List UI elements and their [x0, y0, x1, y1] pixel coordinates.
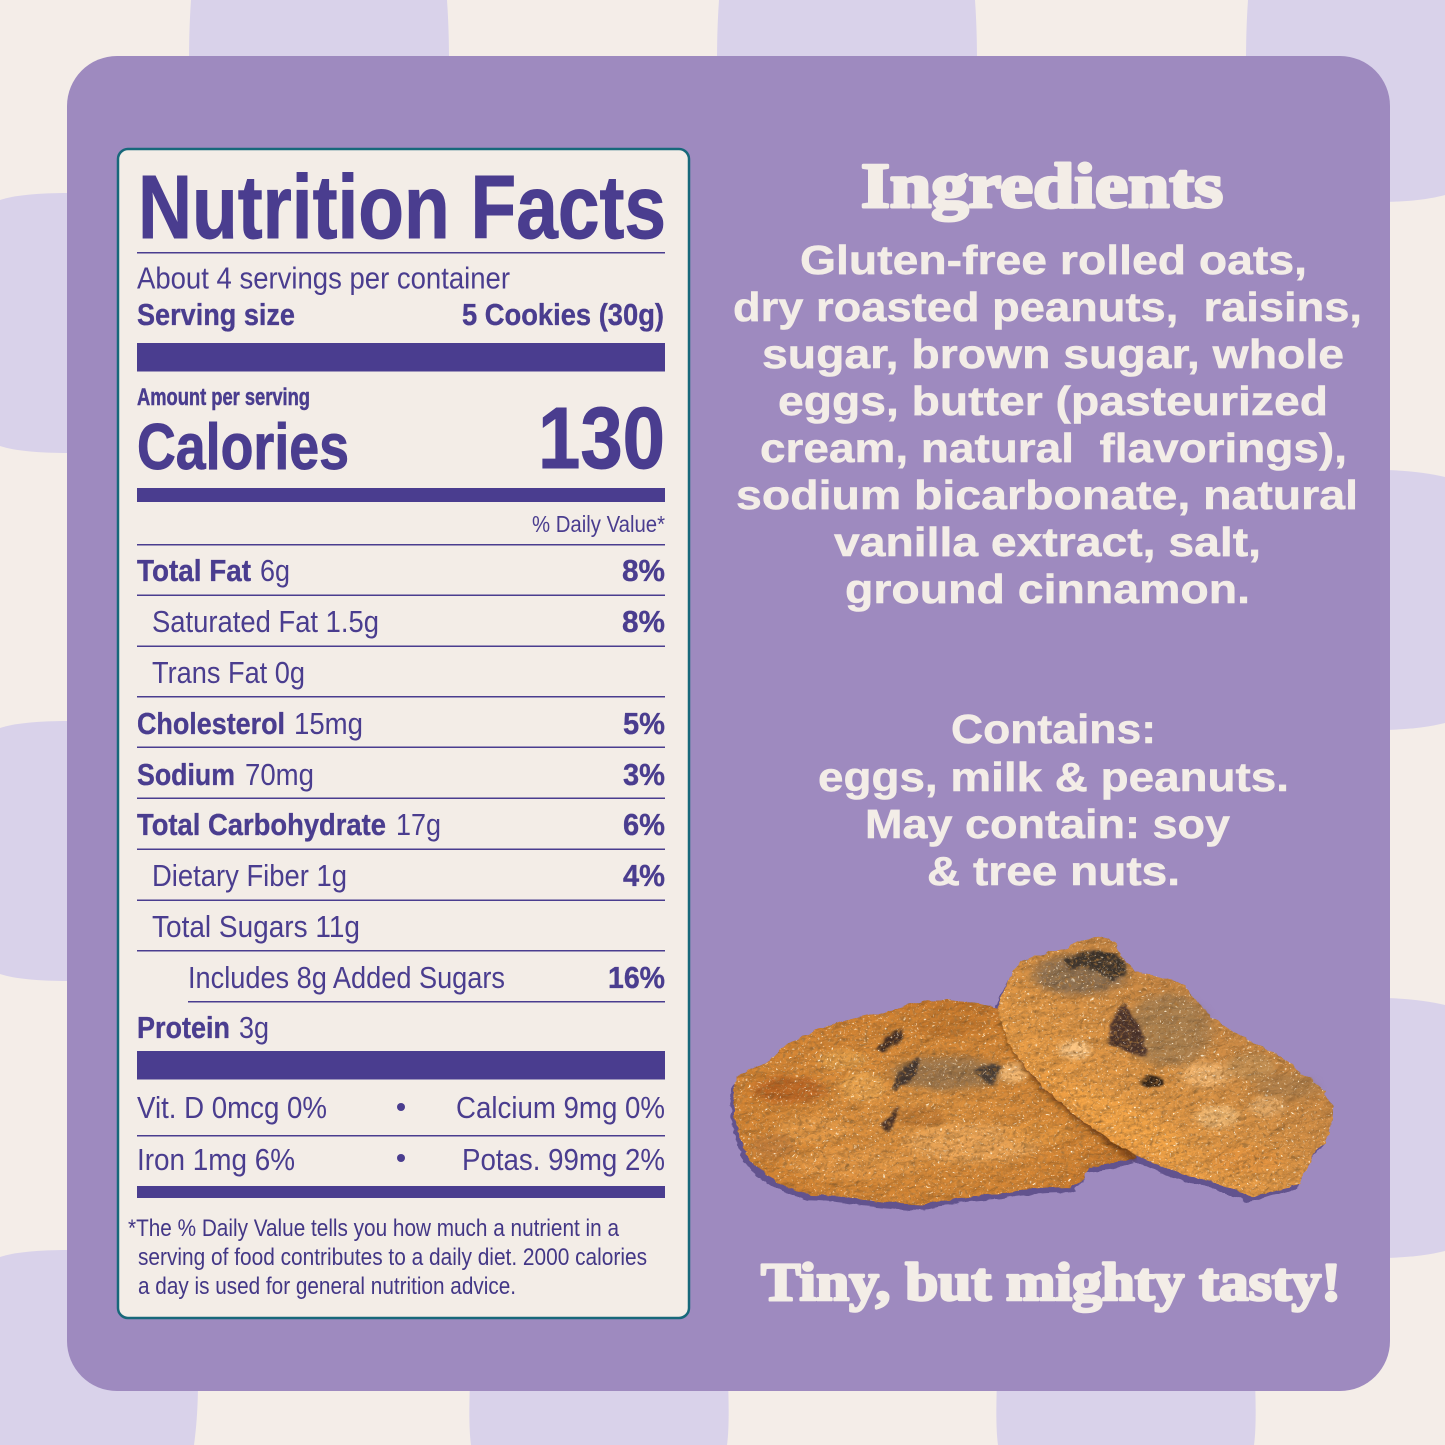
- nutrient rows: 8%: [622, 604, 665, 639]
- ingredients list: [733, 237, 1362, 612]
- ingredients list: sodium bicarbonate, natural: [736, 472, 1358, 518]
- ingredients list: ground cinnamon.: [845, 566, 1250, 612]
- ingredients list: Gluten-free rolled oats,: [800, 237, 1307, 283]
- left cookie: [734, 1000, 1137, 1205]
- nutrient rows: 6%: [623, 807, 665, 842]
- nutrient rows: Dietary Fiber 1g: [152, 858, 347, 893]
- allergen statement: Contains:: [951, 706, 1156, 752]
- serving size: Serving size: [137, 297, 295, 332]
- nutrient rows: Includes 8g Added Sugars: [188, 960, 505, 995]
- vitamins and minerals: Iron 1mg 6%: [137, 1142, 295, 1177]
- calories label: Calories: [137, 410, 349, 483]
- nutrient rows: Protein: [137, 1010, 230, 1045]
- contact shadow under the top cookie: [1006, 1020, 1136, 1158]
- allergen statement: May contain: soy: [865, 801, 1230, 847]
- daily value header: % Daily Value*: [532, 511, 665, 537]
- ingredients list: vanilla extract, salt,: [834, 519, 1261, 565]
- nutrient rows: Total Sugars 11g: [152, 909, 360, 944]
- nutrient rows: 3%: [623, 757, 665, 792]
- footnote: *The % Daily Value tells you how much a nutrient in a: [128, 1215, 619, 1242]
- ingredients list: cream, natural flavorings),: [760, 425, 1347, 471]
- nutrient rows: Sodium: [137, 757, 235, 792]
- nutrient rows: Total Carbohydrate: [137, 807, 386, 842]
- ingredients list: sugar, brown sugar, whole: [762, 331, 1344, 377]
- nutrient rows: 15mg: [294, 706, 363, 741]
- nutrient rows: 70mg: [245, 757, 314, 792]
- amount per serving: Amount per serving: [137, 384, 310, 411]
- nutrient rows: 3g: [239, 1010, 269, 1045]
- nutrient rows: 5%: [623, 706, 665, 741]
- footnote: serving of food contributes to a daily diet. 2000 calories: [138, 1244, 647, 1271]
- tagline: Tiny, but mighty tasty!: [761, 1252, 1341, 1312]
- illustration: two oatmeal raisin cookies: [731, 937, 1333, 1211]
- nutrient rows: 4%: [623, 858, 665, 893]
- vitamins and minerals: Potas. 99mg 2%: [462, 1142, 665, 1177]
- nutrient rows: 16%: [608, 960, 665, 995]
- nutrient rows: Trans Fat 0g: [152, 655, 305, 690]
- nutrient rows: 17g: [396, 807, 441, 842]
- allergen statement: [818, 706, 1289, 894]
- serving size: [137, 297, 664, 332]
- servings per container: About 4 servings per container: [137, 260, 510, 296]
- nutrient rows: Cholesterol: [137, 706, 285, 741]
- panel: nutrition facts label: [118, 149, 689, 1318]
- vitamins and minerals: Calcium 9mg 0%: [456, 1090, 665, 1125]
- calories value: 130: [538, 390, 665, 487]
- nutrient rows: [137, 544, 665, 1045]
- serving size: 5 Cookies (30g): [462, 297, 664, 332]
- allergen statement: eggs, milk & peanuts.: [818, 754, 1289, 800]
- heading: Nutrition Facts: Nutrition Facts: [138, 158, 666, 258]
- ingredients list: eggs, butter (pasteurized: [778, 378, 1328, 424]
- footnote: a day is used for general nutrition advice.: [138, 1273, 516, 1300]
- nutrient rows: Total Fat: [137, 553, 251, 588]
- nutrient rows: Saturated Fat 1.5g: [152, 604, 379, 639]
- right cookie: [998, 937, 1333, 1197]
- allergen statement: & tree nuts.: [927, 848, 1180, 894]
- ingredients list: dry roasted peanuts, raisins,: [733, 284, 1362, 330]
- nutrient rows: 8%: [622, 553, 665, 588]
- heading: Ingredients: Ingredients: [861, 150, 1223, 221]
- footnote: [128, 1215, 647, 1300]
- vitamins and minerals: Vit. D 0mcg 0%: [137, 1090, 327, 1125]
- cookie shadow: [731, 942, 1330, 1211]
- vitamins and minerals: [137, 1090, 665, 1177]
- nutrient rows: 6g: [260, 553, 290, 588]
